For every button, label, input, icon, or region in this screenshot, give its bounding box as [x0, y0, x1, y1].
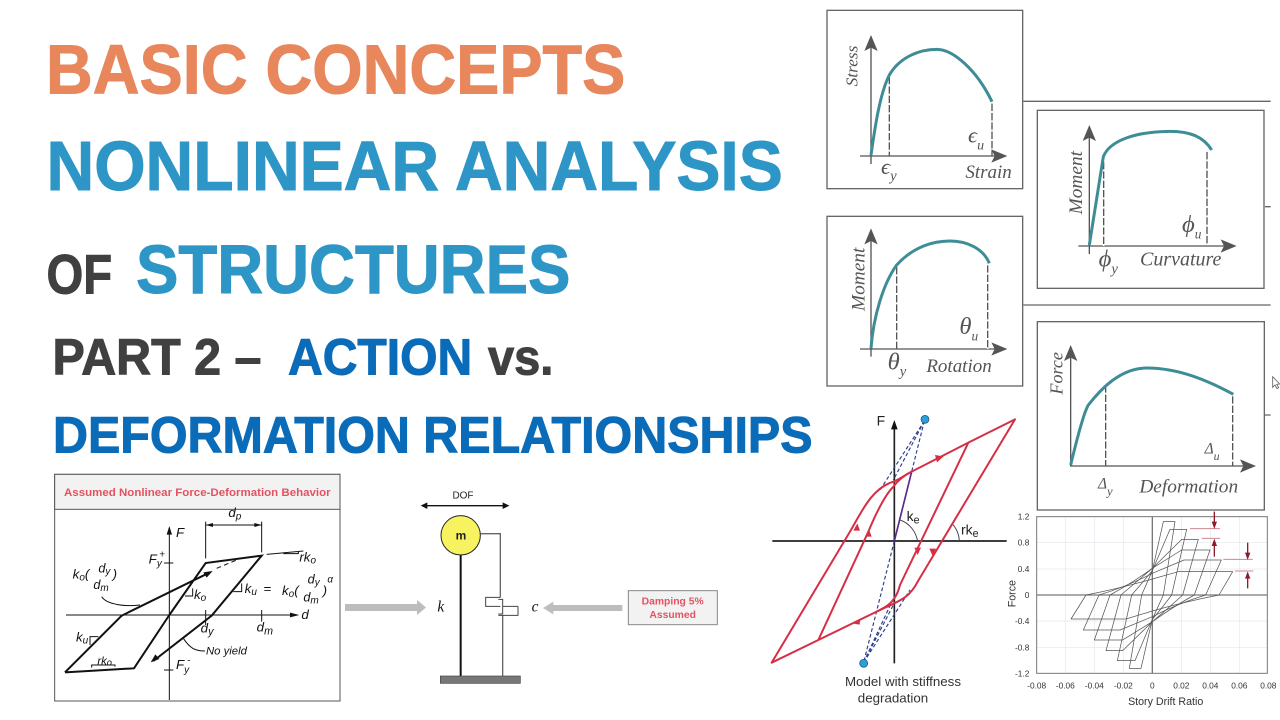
diagram labels: = [263, 581, 271, 596]
grid and frame [1037, 517, 1267, 673]
diagram labels: k [282, 583, 289, 598]
panel: moment-curvature [1037, 110, 1264, 288]
diagram labels: o [289, 589, 295, 600]
panel header [55, 474, 340, 509]
axis labels: rk [961, 521, 973, 537]
stiffness degradation lines [864, 421, 959, 662]
arrow: damping to c [543, 602, 622, 614]
diagram labels: F [176, 525, 185, 540]
diagram labels: o [107, 658, 112, 668]
diagram labels: p [235, 512, 242, 523]
diagram labels: d [257, 620, 264, 635]
label: k: k [437, 598, 445, 615]
panel: stress-strain: y [888, 169, 897, 185]
mass [441, 516, 480, 555]
panel: force-deformation: y [1105, 484, 1113, 498]
diagram labels: k [76, 630, 83, 645]
x axis tick labels: -0.06 [1056, 681, 1075, 691]
diagram labels: d [228, 505, 236, 520]
panel: force-deformation [1037, 322, 1264, 510]
diagram labels: ( [85, 566, 91, 581]
diagram labels: ( [294, 583, 300, 598]
panel: stress-strain: ϵ [968, 123, 977, 148]
panel: force-deformation: Force [1047, 352, 1067, 395]
panel: moment-rotation: Moment [849, 247, 870, 312]
panel: moment-rotation: y [898, 364, 907, 380]
diagram labels: y [183, 665, 190, 676]
hysteresis diagram [65, 522, 303, 700]
panel: stress-strain: Stress [842, 45, 861, 86]
panel: stress-strain [827, 10, 1023, 189]
x axis tick labels: 0.02 [1173, 681, 1190, 691]
x axis tick labels: 0 [1150, 681, 1155, 691]
diagram labels: rk [299, 550, 310, 565]
y axis tick labels: 0.4 [1018, 564, 1030, 574]
diagram labels: o [310, 556, 316, 567]
x axis title: Story Drift Ratio [1128, 696, 1203, 708]
caption [845, 674, 961, 706]
panel: stress-strain: u [977, 138, 984, 153]
hierarchy of action-deformation curves [827, 10, 1280, 510]
diagram labels: d [308, 573, 315, 587]
column and base [440, 555, 520, 683]
panel: moment-rotation [827, 216, 1023, 386]
panel: moment-curvature: y [1109, 261, 1118, 277]
title block [46, 31, 813, 464]
subtitle: part 2: PART 2 – [52, 328, 261, 386]
x axis tick labels: 0.08 [1260, 681, 1277, 691]
x axis tick labels [1027, 681, 1277, 691]
diagram labels: k [245, 581, 251, 596]
mass: m [456, 528, 466, 542]
panel: moment-rotation: θ [888, 348, 900, 375]
diagram labels: y [156, 559, 163, 570]
dof label and arrow: DOF [452, 491, 474, 502]
panel: moment-rotation: Rotation [925, 356, 992, 377]
dof label and arrow [421, 491, 509, 509]
diagram labels: u [83, 636, 89, 647]
diagram labels: m [310, 596, 319, 607]
x axis tick labels: 0.04 [1202, 681, 1219, 691]
title line: nonlinear analysis: NONLINEAR ANALYSIS [46, 127, 783, 205]
hysteresis loops [772, 419, 1015, 663]
axis labels: k [907, 508, 914, 524]
connector lines [1023, 101, 1271, 415]
axis labels: F [877, 413, 885, 429]
y axis tick labels: -1.2 [1015, 668, 1030, 678]
panel: moment-curvature: ϕ [1182, 211, 1195, 238]
axes [772, 420, 1007, 663]
diagram labels: u [251, 587, 257, 598]
panel: single degree of freedom model [421, 491, 717, 683]
panel: force-deformation: Δ [1205, 440, 1214, 457]
axis labels: e [973, 528, 979, 540]
diagram labels: α [327, 574, 333, 585]
panel: stress-strain: Strain [965, 162, 1012, 183]
diagram labels: d [98, 562, 105, 576]
y axis tick labels: 0 [1025, 590, 1030, 600]
x axis tick labels: -0.04 [1085, 681, 1104, 691]
axis labels [877, 413, 979, 540]
icon: mouse cursor [1273, 377, 1280, 389]
panel: force-deformation: Deformation [1138, 477, 1238, 498]
title line: basic concepts: BASIC CONCEPTS [46, 31, 625, 109]
panel: moment-curvature: Moment [1066, 150, 1087, 215]
diagram labels: F [176, 657, 184, 672]
damper [481, 534, 518, 676]
y axis tick labels: -0.8 [1015, 642, 1030, 652]
x axis tick labels: 0.06 [1231, 681, 1248, 691]
caption: Model with stiffness [845, 674, 961, 689]
arrow: diagram to stiffness [345, 600, 426, 615]
diagram labels: rk [97, 655, 107, 667]
envelope markers [1190, 512, 1253, 588]
diagram labels: No yield [206, 645, 248, 657]
panel: moment-rotation: u [971, 329, 978, 344]
label: c: c [532, 598, 539, 615]
diagram labels: k [73, 566, 79, 581]
load points [860, 415, 929, 667]
y axis tick labels [1015, 512, 1030, 678]
y axis tick labels: 0.8 [1018, 538, 1030, 548]
subtitle: action: ACTION [288, 328, 472, 386]
x axis tick labels: -0.08 [1027, 681, 1047, 691]
title word: of: OF [46, 243, 112, 305]
callout: damping assumed: Damping 5% [642, 596, 704, 607]
diagram labels: y [314, 578, 321, 589]
panel: moment-curvature: ϕ [1099, 246, 1111, 273]
diagram labels: m [264, 625, 273, 637]
diagram labels: m [100, 583, 109, 594]
diagram labels: d [201, 620, 208, 635]
panel: moment-rotation: θ [959, 313, 971, 340]
diagram labels: F [149, 551, 157, 566]
chart: hysteresis model with stiffness degradation [772, 413, 1015, 706]
panel: moment-curvature: u [1195, 227, 1202, 242]
diagram labels: o [201, 593, 207, 604]
axis labels: e [914, 515, 920, 527]
callout: damping assumed: Assumed [649, 610, 696, 621]
diagram labels: d [303, 591, 310, 605]
subtitle: deformation relationships: DEFORMATION RELATIONSHIPS [53, 406, 813, 464]
title word: structures: STRUCTURES [136, 232, 570, 309]
diagram labels: ) [111, 566, 117, 581]
diagram labels: - [187, 656, 191, 667]
panel header: Assumed Nonlinear Force-Deformation Behavior [64, 487, 331, 499]
panel: stress-strain: ϵ [881, 154, 890, 179]
chart: force vs story drift ratio [1006, 512, 1277, 708]
force loops [1071, 522, 1233, 668]
caption: degradation [858, 691, 928, 706]
diagram labels: k [194, 587, 201, 602]
panel: moment-curvature: Curvature [1140, 248, 1222, 270]
diagram labels: o [79, 572, 85, 583]
panel: force-deformation: u [1214, 449, 1220, 463]
panel: force-deformation: Δ [1098, 476, 1107, 493]
y axis tick labels: 1.2 [1018, 512, 1030, 522]
diagram labels: d [301, 607, 309, 622]
callout: damping assumed [628, 591, 717, 625]
panel: assumed nonlinear force-deformation behavior [55, 474, 340, 701]
diagram labels: y [104, 567, 111, 578]
diagram labels: ) [321, 583, 327, 598]
x axis tick labels: -0.02 [1114, 681, 1133, 691]
diagram labels [73, 505, 333, 676]
diagram labels: d [93, 578, 100, 592]
subtitle: vs.: vs. [488, 330, 553, 386]
y axis title: Force [1006, 580, 1018, 607]
diagram labels: y [207, 626, 214, 638]
y axis tick labels: -0.4 [1015, 616, 1030, 626]
diagram labels: + [159, 549, 165, 560]
